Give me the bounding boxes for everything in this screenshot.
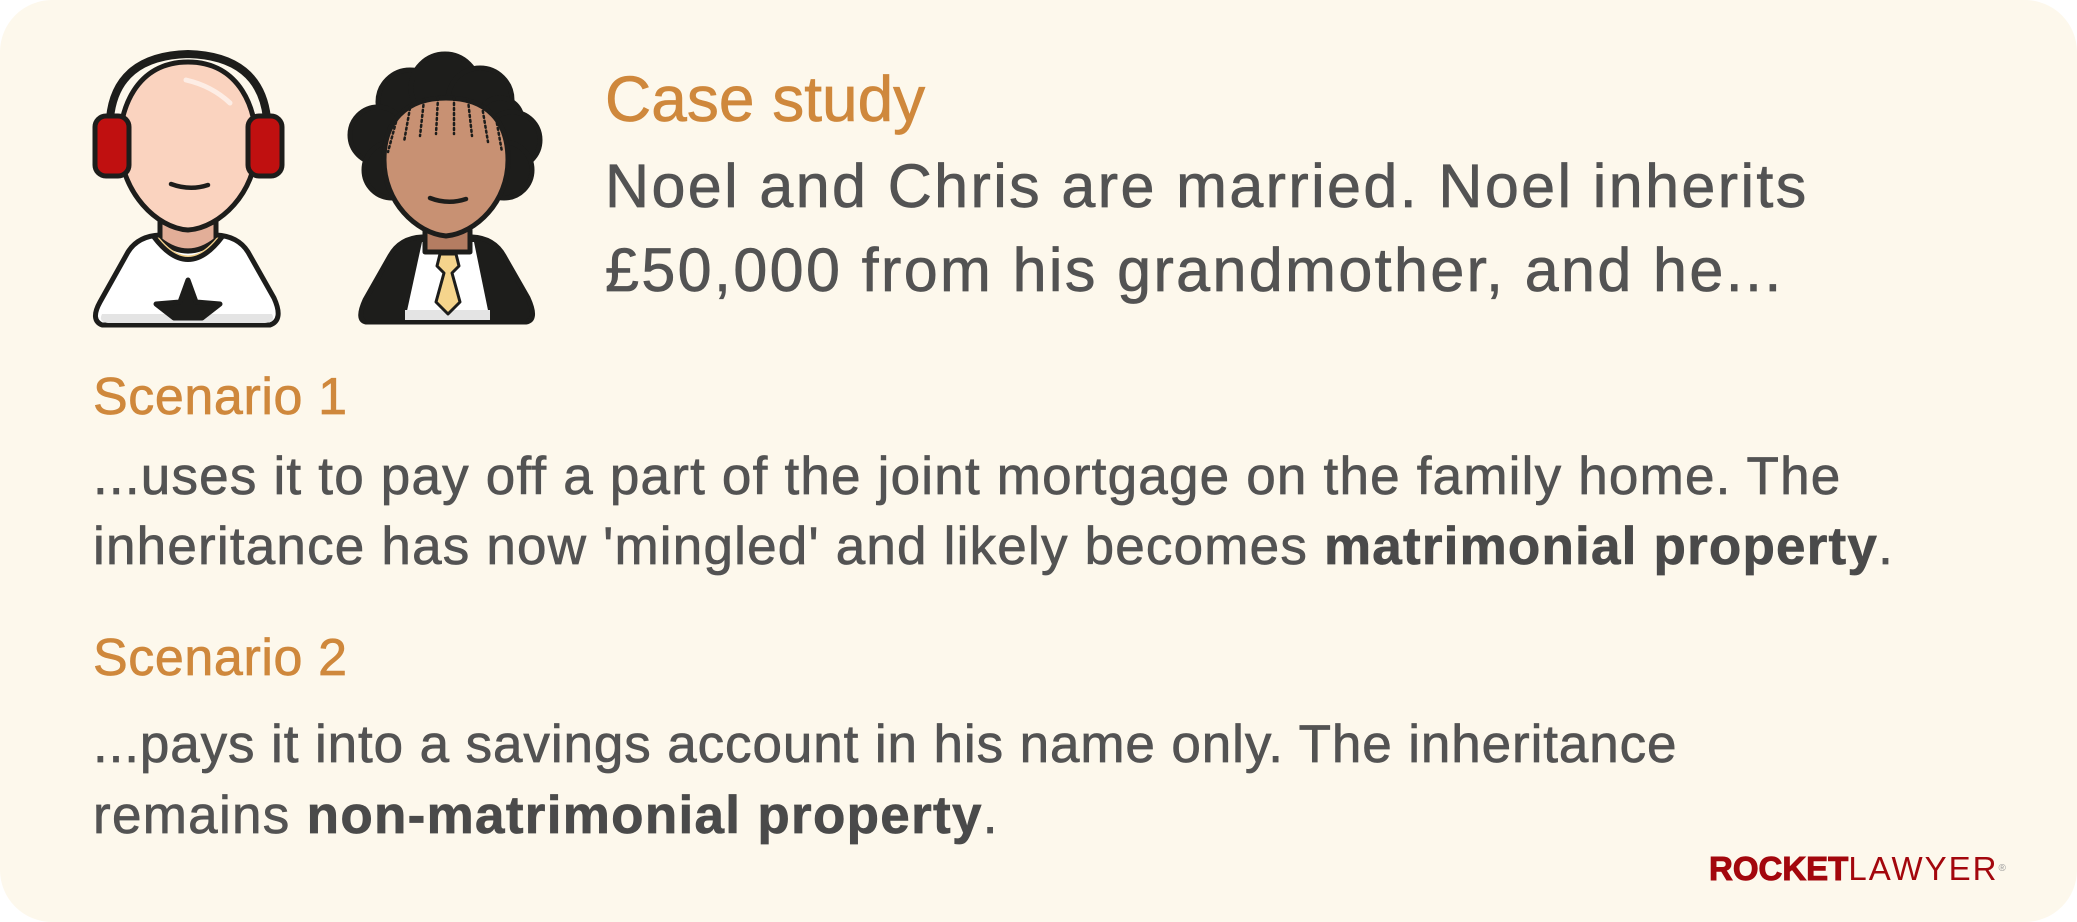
intro text: £50,000 from his grandmother, and he...	[605, 236, 1784, 304]
intro text: Noel and Chris are married. Noel inherits	[605, 152, 1809, 220]
text: Scenario 2: ...pays it into a savings account in his name only. The inheritance	[93, 715, 1677, 774]
text: Scenario 1: inheritance has now 'mingled' and likely becomes matrimonial property.	[93, 517, 1894, 576]
icon: Chris in suit	[350, 54, 540, 322]
heading: Case study: Case study	[605, 63, 925, 135]
icon: Noel with headphones	[95, 54, 282, 325]
text: Scenario 1: ...uses it to pay off a part of the joint mortgage on the family home. The	[93, 447, 1841, 506]
heading: Scenario 2: Scenario 2	[93, 629, 348, 687]
text: Scenario 1	[93, 447, 1894, 576]
heading: Scenario 1: Scenario 1	[93, 368, 348, 426]
text: Scenario 2: remains non-matrimonial property.	[93, 786, 999, 845]
text: Scenario 2	[93, 715, 1677, 845]
logo: Rocket Lawyer: ROCKETLAWYER®	[1709, 850, 2006, 887]
icons: Noel and Chris	[92, 50, 542, 328]
intro text	[605, 152, 1809, 304]
